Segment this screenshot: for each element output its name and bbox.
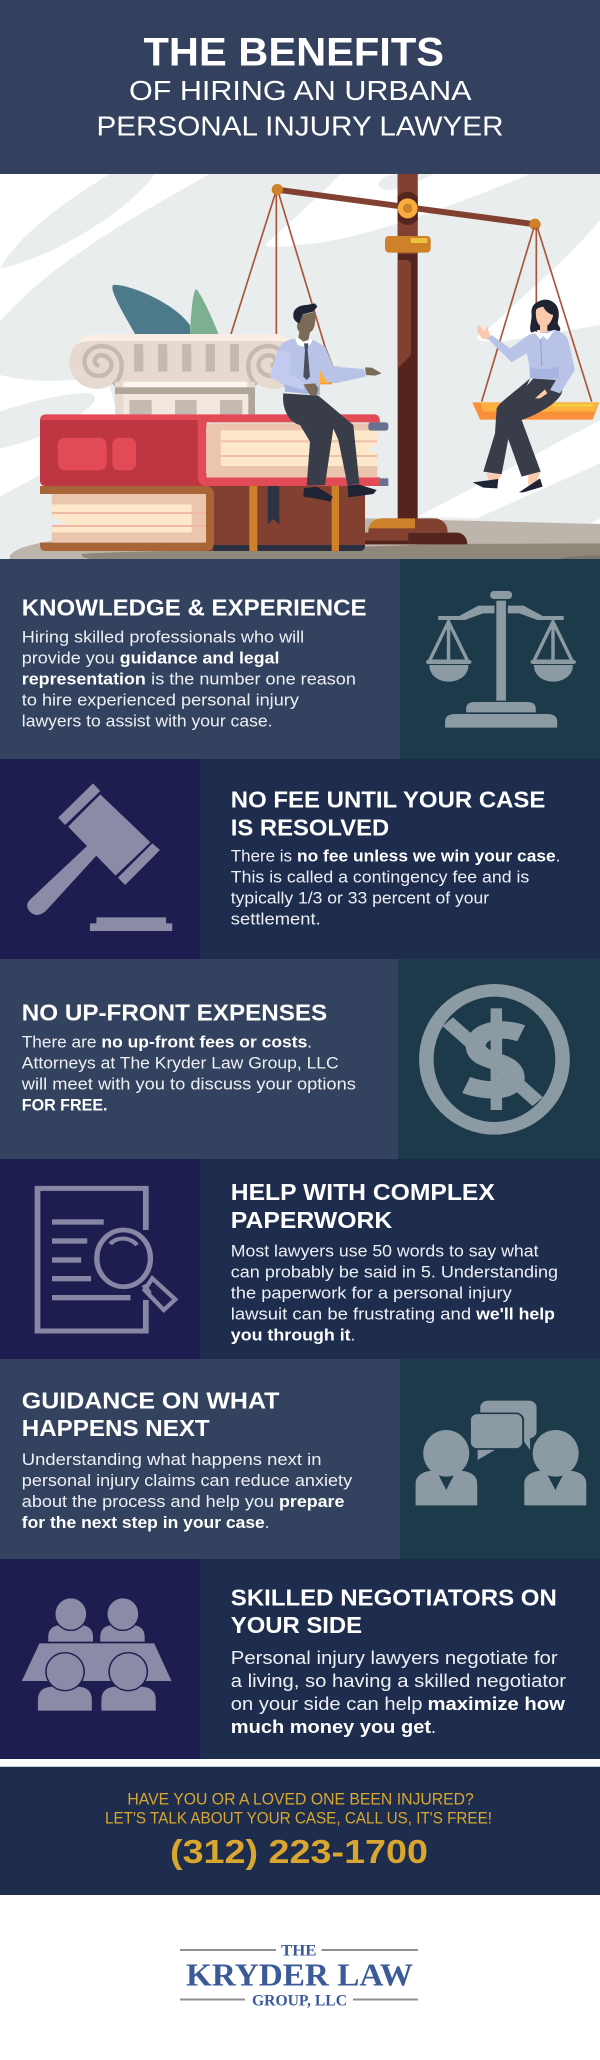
heading: NO FEE UNTIL YOUR CASE — [231, 787, 545, 813]
icon: document with magnifier — [38, 1188, 175, 1331]
scale base — [365, 518, 467, 544]
body text: . — [307, 1033, 312, 1052]
icon: gavel — [27, 783, 172, 931]
panel: knowledge and experience — [0, 559, 600, 759]
icon: crossed-out dollar — [426, 990, 563, 1128]
hair — [530, 300, 560, 333]
body text: prepare — [279, 1492, 344, 1511]
icon: two people talking — [416, 1401, 586, 1505]
cta text: LET'S TALK ABOUT YOUR CASE, CALL US, IT'S FREE! — [105, 1808, 492, 1827]
heading: IS RESOLVED — [231, 815, 389, 841]
cta text: HAVE YOU OR A LOVED ONE BEEN INJURED? — [127, 1789, 474, 1808]
blouse — [487, 329, 575, 398]
plant leaves — [112, 285, 218, 334]
heading — [231, 1179, 495, 1233]
body text — [231, 1647, 566, 1737]
body text: for the next step in your case — [22, 1513, 265, 1532]
body text: representation — [22, 669, 146, 688]
title: THE BENEFITS — [144, 30, 444, 74]
body text: the paperwork for a personal injury — [231, 1284, 512, 1303]
heading — [22, 1388, 279, 1441]
body text: FOR FREE. — [22, 1096, 107, 1115]
body text: . — [265, 1513, 270, 1532]
icon: negotiation table — [22, 1598, 171, 1711]
body text: maximize how — [428, 1693, 566, 1714]
head — [293, 303, 317, 342]
heading — [231, 787, 545, 841]
cta text — [105, 1789, 492, 1827]
body text: There is — [231, 847, 292, 866]
body text: provide you — [22, 648, 115, 667]
heading: KNOWLEDGE & EXPERIENCE — [22, 595, 367, 621]
phone number: (312) 223-1700 — [170, 1833, 428, 1870]
pivot and clamp — [272, 184, 541, 253]
body text: typically 1/3 or 33 percent of your — [231, 889, 489, 908]
logo: The Kryder Law Group, LLC: THE — [281, 1943, 316, 1960]
body text — [22, 627, 356, 730]
logo: The Kryder Law Group, LLC — [180, 1943, 418, 2010]
shirt — [270, 338, 366, 395]
pants — [483, 378, 562, 477]
body text — [21, 1033, 356, 1115]
body text — [231, 1242, 558, 1345]
scale strings right — [482, 227, 592, 402]
body text: will meet with you to discuss your options — [21, 1075, 356, 1094]
body text: you through it — [231, 1326, 351, 1345]
heading — [231, 1585, 557, 1638]
body text: Hiring skilled professionals who will — [22, 627, 304, 646]
ground — [10, 518, 600, 563]
body text: This is called a contingency fee and is — [231, 868, 529, 887]
woman client on scale — [473, 300, 575, 492]
title: OF HIRING AN URBANA — [129, 75, 472, 106]
body text — [231, 847, 560, 929]
body text: much money you get — [231, 1716, 431, 1737]
heading: GUIDANCE ON WHAT — [22, 1388, 279, 1414]
stacked books — [40, 414, 388, 551]
title — [96, 30, 503, 142]
heading: PAPERWORK — [231, 1207, 393, 1233]
icon: balance scale — [426, 591, 576, 728]
body text: a living, so having a skilled negotiator — [231, 1670, 566, 1691]
panel: no fee until resolved — [0, 759, 600, 959]
body text: on your side can help — [231, 1693, 422, 1714]
body text: we'll help — [475, 1305, 555, 1324]
scale left pan — [320, 367, 340, 384]
body text: Most lawyers use 50 words to say what — [231, 1242, 539, 1261]
body text — [22, 1450, 353, 1532]
body text: . — [556, 847, 560, 866]
panel: skilled negotiators — [0, 1559, 600, 1759]
hands — [303, 367, 382, 396]
panel: help with complex paperwork — [0, 1159, 600, 1359]
body text: is the number one reason — [151, 669, 356, 688]
scale pole — [398, 174, 418, 521]
heading: YOUR SIDE — [231, 1612, 362, 1638]
heading: HAPPENS NEXT — [22, 1415, 210, 1441]
heading: SKILLED NEGOTIATORS ON — [231, 1585, 557, 1611]
greek column capital — [69, 334, 301, 415]
heading: HELP WITH COMPLEX — [231, 1179, 495, 1205]
tie — [303, 343, 310, 380]
body text: lawyers to assist with your case. — [22, 711, 272, 730]
logo: The Kryder Law Group, LLC: KRYDER LAW — [186, 1957, 413, 1993]
red book — [40, 414, 388, 486]
pants — [283, 393, 359, 486]
title: PERSONAL INJURY LAWYER — [96, 111, 503, 142]
scale strings left — [231, 193, 333, 368]
panel: guidance on what happens next — [0, 1359, 600, 1559]
body text: no fee unless we win your case — [297, 847, 556, 866]
body text: Attorneys at The Kryder Law Group, LLC — [22, 1054, 339, 1073]
heading: NO UP-FRONT EXPENSES — [22, 999, 327, 1025]
body text: to hire experienced personal injury — [22, 690, 299, 709]
body text: Personal injury lawyers negotiate for — [231, 1647, 558, 1668]
body text: Understanding what happens next in — [22, 1450, 322, 1469]
body text: There are — [22, 1033, 96, 1052]
logo: The Kryder Law Group, LLC: GROUP, LLC — [252, 1993, 347, 2010]
body text: settlement. — [231, 910, 321, 929]
body text: no up-front fees or costs — [101, 1033, 307, 1052]
man lawyer sitting on books — [270, 303, 382, 502]
shoes — [473, 472, 543, 492]
face and hand — [477, 307, 553, 340]
panel: no up-front expenses — [0, 959, 600, 1159]
body text: personal injury claims can reduce anxiety — [22, 1471, 353, 1490]
scale right pan — [472, 402, 599, 420]
body text: . — [431, 1716, 436, 1737]
beam — [277, 190, 535, 224]
call to action banner — [0, 1766, 600, 1895]
shoes — [303, 484, 377, 502]
brown book — [40, 486, 365, 551]
body text: lawsuit can be frustrating and — [231, 1305, 471, 1324]
header banner — [0, 0, 600, 174]
body text: can probably be said in 5. Understanding — [231, 1263, 558, 1282]
illustration: scales of justice with lawyer and client — [0, 174, 600, 563]
body text: . — [350, 1326, 355, 1345]
body text: guidance and legal — [120, 648, 279, 667]
body text: about the process and help you — [22, 1492, 274, 1511]
